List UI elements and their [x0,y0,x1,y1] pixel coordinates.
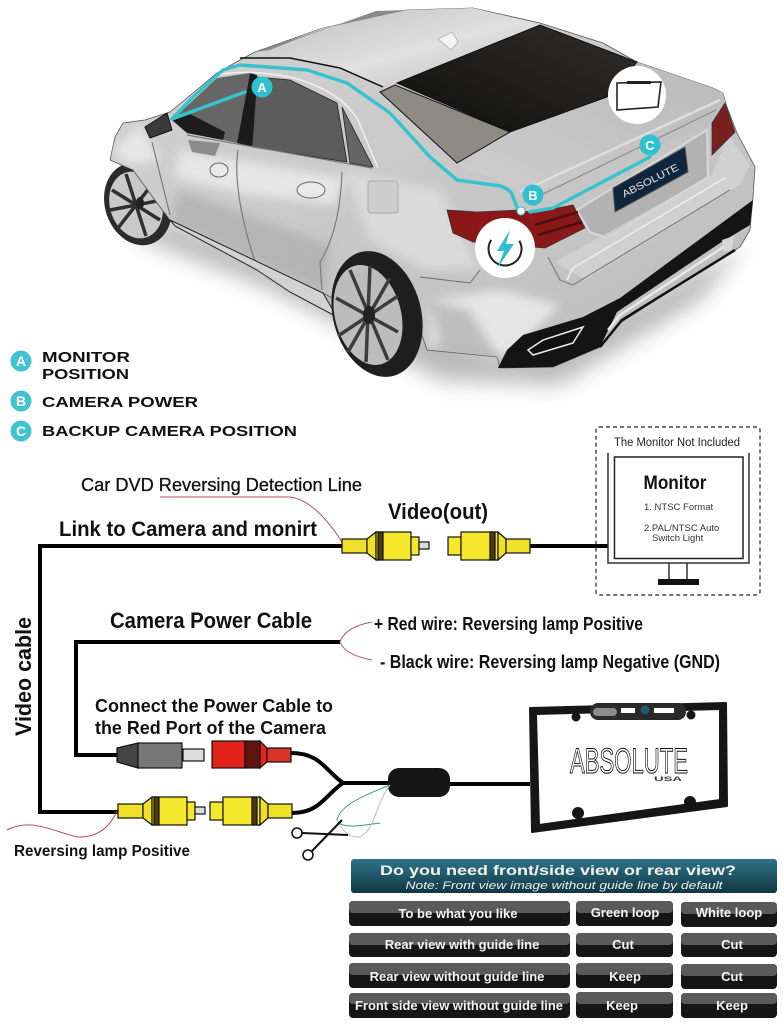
legend B [10,390,198,412]
window handle shade [188,140,220,156]
row 2: Rear view with guide line [385,937,539,952]
camera bar [590,703,686,720]
b pillar [237,73,257,147]
roof antenna [438,32,458,50]
callout: power bolt [475,218,535,278]
diagram labels [11,475,720,860]
row 1 [349,901,777,927]
legend A: MONITOR [42,349,130,366]
left tail light [447,205,585,248]
legend C: BACKUP CAMERA POSITION [42,423,297,440]
monitor specs [644,502,719,544]
plate recess [577,130,708,238]
label: connect instruction [95,696,333,738]
dashed outline [596,427,760,595]
car body [110,8,755,368]
connector: gray power plug [117,743,204,768]
legend C [10,420,297,442]
marker C: C [645,138,655,153]
marker B [522,184,544,206]
quarter panel seam [420,270,480,283]
connector: bottom right yellow [210,797,292,825]
connector: top right yellow [448,532,530,560]
car roof [255,8,540,87]
marker A: A [257,80,267,95]
label: power cable: Camera Power Cable [110,608,312,633]
legend A: POSITION [42,366,129,383]
lower black edge [600,250,735,347]
rear glass light portion [380,85,510,163]
car illustration [94,8,755,387]
mount tabs [572,711,696,818]
label: car dvd line: Car DVD Reversing Detection Line [81,475,362,495]
table header: Do you need front/side view or rear view? [380,862,736,878]
legend C: C [16,423,26,439]
row 3: Keep [609,969,641,984]
trunk crease shadow [535,110,716,198]
table header [351,859,777,893]
monitor specs: Switch Light [652,533,704,544]
row 4: Keep [716,998,748,1013]
sill strip [170,220,337,317]
front wheel [94,154,182,254]
left tail light bars [535,212,582,235]
label: red wire: + Red wire: Reversing lamp Positive [374,614,643,634]
legend [10,349,297,442]
window trim [215,72,378,168]
exhaust [528,327,583,355]
fuel cap [368,181,398,213]
label: video cable: Video cable [11,617,36,736]
row 2: Cut [612,937,634,952]
thin signal wires [7,497,372,837]
front window [172,73,250,143]
body shading [112,125,560,360]
label: link to camera: Link to Camera and monirt [59,518,317,541]
monitor specs: 2.PAL/NTSC Auto [644,523,719,534]
scissors icon [292,820,348,860]
trunk lid [457,62,727,190]
row 4: Keep [606,998,638,1013]
door handles [210,163,325,198]
lower trim line [608,246,725,330]
bumper reflector groove [567,178,725,280]
guide line table [349,859,777,1018]
connector: top left yellow [342,532,429,560]
connector: red power socket [212,741,291,768]
sunroof edge [255,10,407,52]
row 4 [349,992,777,1018]
row 2: Cut [721,937,743,952]
table header: Note: Front view image without guide line by default [406,880,724,892]
row 3 [349,963,777,989]
label: black wire: - Black wire: Reversing lamp Negative (GND) [380,652,720,672]
front window interior [172,114,225,140]
bumper crease [548,190,730,285]
legend B: CAMERA POWER [42,394,198,411]
wiring diagram cables [40,546,608,813]
legend A [10,349,130,383]
bumper upper [555,135,750,280]
black lower bumper [498,200,753,368]
rear side window [252,77,347,162]
row 1: White loop [696,905,762,920]
frame body [530,703,727,832]
callout: license frame [608,66,666,124]
legend A: A [16,353,26,369]
right tail light [712,103,735,155]
monitor frame [608,453,749,563]
monitor screen [614,457,743,558]
row 2 [349,933,777,957]
marker A [252,76,272,98]
trunk crease [520,100,720,192]
inline control box [388,768,450,797]
monitor panel [596,427,760,595]
row 3: Cut [721,969,743,984]
car ground shadow [130,220,745,385]
label: connect instruction: Connect the Power Cable to [95,696,333,716]
marker B: B [528,188,538,203]
brand logo: ABSOLUTE [570,742,688,781]
marker C [640,134,660,156]
row 1: To be what you like [399,906,517,921]
label: reversing lamp: Reversing lamp Positive [14,843,190,860]
quarter window [342,107,373,167]
reflector tip [722,236,734,252]
monitor specs: 1. NTSC Format [644,502,714,513]
license plate [613,147,688,212]
rear glass dark portion [397,25,637,132]
legend B: B [16,393,26,409]
loop wires [337,785,390,837]
side mirror [145,113,172,138]
route dot [517,207,525,215]
camera license frame [530,703,727,832]
row 3: Rear view without guide line [370,969,544,984]
brand usa: USA [654,776,683,783]
row 1: Green loop [591,905,659,920]
monitor stand [658,563,699,585]
label: connect instruction: the Red Port of the Camera [95,718,327,738]
monitor note: The Monitor Not Included [614,437,740,449]
connector: bottom left yellow [118,797,205,825]
door lines [152,135,372,290]
plate logo: ABSOLUTE [621,162,681,200]
wiring route [172,65,650,212]
row 4: Front side view without guide line [355,998,563,1013]
label: video out: Video(out) [388,499,488,524]
rear wheel [318,241,436,387]
monitor heading: Monitor [644,473,707,494]
roof rail line [240,58,383,87]
